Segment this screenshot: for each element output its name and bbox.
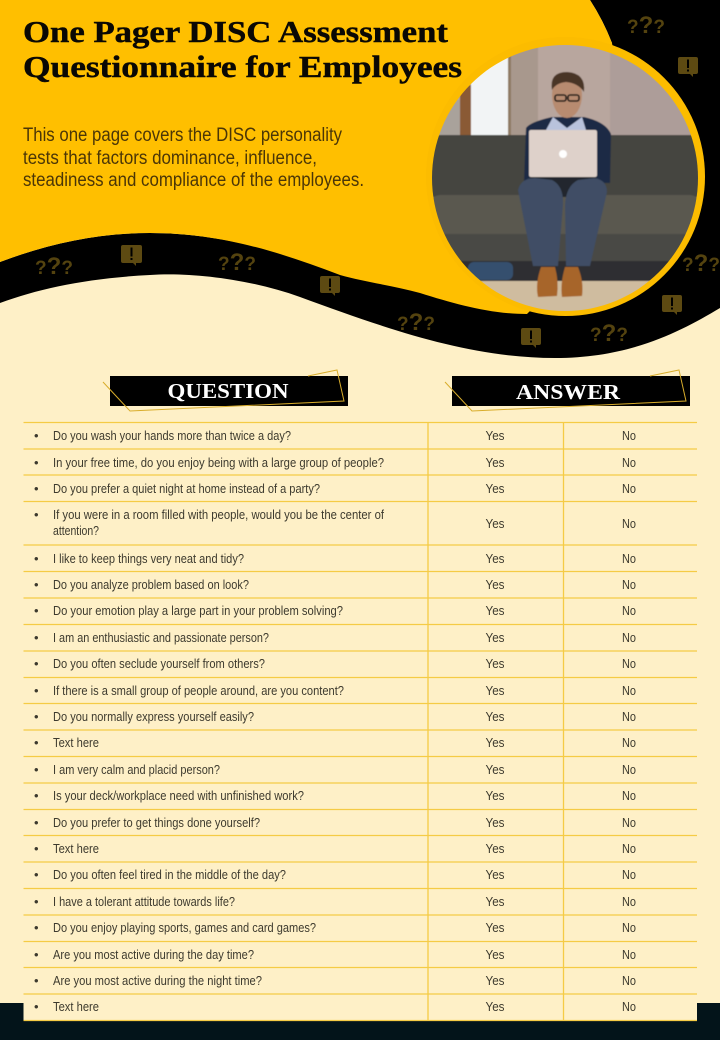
row 4: If you were in a room filled with people, would you be the center of [53, 507, 384, 522]
row 20 [34, 947, 636, 962]
row 11: Yes [486, 709, 505, 724]
row 15: • [34, 815, 39, 830]
row 14: Yes [486, 788, 505, 803]
row 7: • [34, 603, 39, 618]
bottom dark band [0, 1003, 720, 1040]
row 6: Yes [486, 577, 505, 592]
row 5: Yes [486, 551, 505, 566]
row 2 [34, 455, 636, 470]
row 19: Do you enjoy playing sports, games and card games? [53, 920, 316, 935]
alert bubble icon [320, 276, 340, 296]
row 17: Do you often feel tired in the middle of the day? [53, 867, 286, 882]
row 18: Yes [486, 894, 505, 909]
row 17 [34, 867, 636, 882]
row 16: No [622, 841, 636, 856]
row 7 [34, 603, 636, 618]
question marks icon: ??? [590, 320, 628, 347]
row 8: • [34, 630, 39, 645]
row 9 [34, 656, 636, 671]
row 11: No [622, 709, 636, 724]
row 10: No [622, 683, 636, 698]
row 15 [34, 815, 636, 830]
row 7: No [622, 603, 636, 618]
row 5 [34, 551, 636, 566]
row 16: Yes [486, 841, 505, 856]
row 12: Yes [486, 735, 505, 750]
row 6: Do you analyze problem based on look? [53, 577, 249, 592]
row 2: No [622, 455, 636, 470]
row 3: Do you prefer a quiet night at home instead of a party? [53, 481, 320, 496]
row 21: No [622, 973, 636, 988]
row 20: No [622, 947, 636, 962]
row 14: No [622, 788, 636, 803]
row 16: • [34, 841, 39, 856]
row 17: • [34, 867, 39, 882]
row 10: If there is a small group of people around, are you content? [53, 683, 344, 698]
photo: man with laptop on sofa [430, 40, 700, 313]
question marks icon: ??? [397, 309, 435, 336]
intro text: This one page covers the DISC personality [23, 125, 342, 146]
row 3: No [622, 481, 636, 496]
row 1: Yes [486, 428, 505, 443]
row 18: I have a tolerant attitude towards life? [53, 894, 235, 909]
row 8: Yes [486, 630, 505, 645]
row 19 [34, 920, 636, 935]
question marks icon: ??? [682, 250, 720, 277]
row 10: Yes [486, 683, 505, 698]
row 16 [34, 841, 636, 856]
row 4: • [34, 507, 39, 522]
row 18: • [34, 894, 39, 909]
title [23, 14, 462, 84]
row 22: Text here [53, 999, 99, 1014]
row 10: • [34, 683, 39, 698]
row 14 [34, 788, 636, 803]
row 11: Do you normally express yourself easily? [53, 709, 254, 724]
row 8 [34, 630, 636, 645]
row 9: • [34, 656, 39, 671]
intro text: steadiness and compliance of the employees. [23, 170, 364, 191]
row 1 [34, 428, 636, 443]
row 22: • [34, 999, 39, 1014]
row 11 [34, 709, 636, 724]
row 22 [34, 999, 636, 1014]
row 21: Are you most active during the night time? [53, 973, 262, 988]
questionnaire table [24, 422, 697, 1020]
row 20: • [34, 947, 39, 962]
row 2: In your free time, do you enjoy being with a large group of people? [53, 455, 384, 470]
row 11: • [34, 709, 39, 724]
row 20: Yes [486, 947, 505, 962]
question marks icon: ??? [35, 253, 73, 280]
row 4: No [622, 516, 636, 531]
row 15: Do you prefer to get things done yourself? [53, 815, 260, 830]
row 9: Yes [486, 656, 505, 671]
row 13 [34, 762, 636, 777]
row 21: • [34, 973, 39, 988]
alert bubble icon [121, 245, 142, 266]
row 9: Do you often seclude yourself from others? [53, 656, 265, 671]
row 3 [34, 481, 636, 496]
row 19: No [622, 920, 636, 935]
row 14: Is your deck/workplace need with unfinished work? [53, 788, 304, 803]
row 19: Yes [486, 920, 505, 935]
row 12: No [622, 735, 636, 750]
row 17: No [622, 867, 636, 882]
alert bubble icon [662, 295, 682, 315]
row 13: No [622, 762, 636, 777]
question marks icon: ??? [627, 12, 665, 39]
row 18: No [622, 894, 636, 909]
header: question [103, 370, 348, 411]
yellow header panel [0, 0, 640, 314]
intro text [23, 125, 364, 191]
row 5: I like to keep things very neat and tidy? [53, 551, 244, 566]
header: answer [445, 370, 690, 411]
row 22: Yes [486, 999, 505, 1014]
row 21 [34, 973, 636, 988]
intro text: tests that factors dominance, influence, [23, 148, 317, 169]
photo ring [426, 37, 705, 316]
row 3: Yes [486, 481, 505, 496]
row 6: No [622, 577, 636, 592]
row 6: • [34, 577, 39, 592]
row 7: Do your emotion play a large part in your problem solving? [53, 603, 343, 618]
row 3: • [34, 481, 39, 496]
row 13: • [34, 762, 39, 777]
alert bubble icon [678, 57, 698, 77]
row 4 [34, 507, 636, 538]
row 12: Text here [53, 735, 99, 750]
row 8: I am an enthusiastic and passionate person? [53, 630, 269, 645]
row 5: No [622, 551, 636, 566]
row 21: Yes [486, 973, 505, 988]
row 6 [34, 577, 636, 592]
row 13: I am very calm and placid person? [53, 762, 220, 777]
row 22: No [622, 999, 636, 1014]
row 12: • [34, 735, 39, 750]
row 12 [34, 735, 636, 750]
header: answer: ANSWER [516, 380, 621, 404]
row 14: • [34, 788, 39, 803]
row 4: Yes [486, 516, 505, 531]
black header wave [0, 0, 720, 358]
title: One Pager DISC Assessment [23, 14, 449, 49]
row 15: No [622, 815, 636, 830]
row 7: Yes [486, 603, 505, 618]
row 16: Text here [53, 841, 99, 856]
row 1: Do you wash your hands more than twice a day? [53, 428, 291, 443]
row 5: • [34, 551, 39, 566]
row 2: • [34, 455, 39, 470]
header: question: QUESTION [168, 379, 289, 403]
title: Questionnaire for Employees [23, 49, 462, 84]
row 20: Are you most active during the day time? [53, 947, 254, 962]
row 19: • [34, 920, 39, 935]
row 15: Yes [486, 815, 505, 830]
row 1: No [622, 428, 636, 443]
row 1: • [34, 428, 39, 443]
row 18 [34, 894, 636, 909]
row 13: Yes [486, 762, 505, 777]
question marks icon: ??? [218, 249, 256, 276]
row 8: No [622, 630, 636, 645]
row 10 [34, 683, 636, 698]
alert bubble icon [521, 328, 541, 348]
row 9: No [622, 656, 636, 671]
row 17: Yes [486, 867, 505, 882]
row 4: attention? [53, 523, 99, 538]
row 2: Yes [486, 455, 505, 470]
